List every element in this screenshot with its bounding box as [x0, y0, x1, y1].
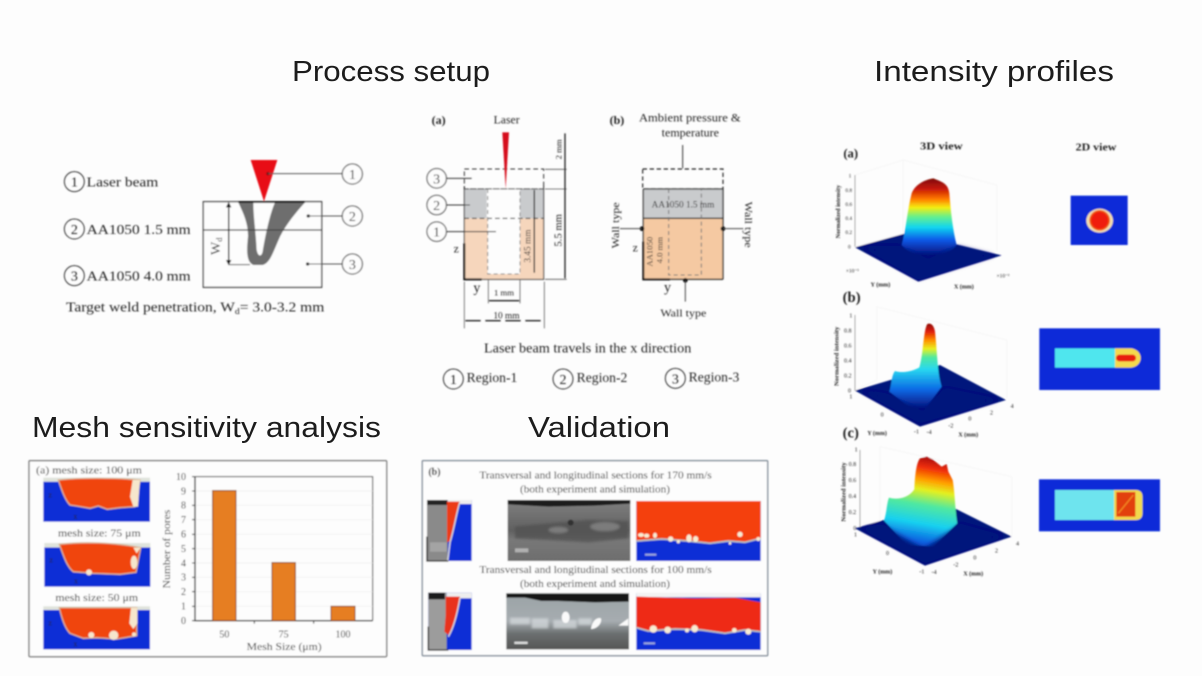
diagram (b): boundary conditions: temperature [662, 128, 719, 140]
2D heat map [1071, 196, 1128, 245]
3D surface plot: 0 [848, 244, 851, 250]
bar: 100 [331, 606, 355, 621]
3D surface plot b: 0.8 [844, 328, 851, 334]
callouts: numbered leader lines: 3 [349, 258, 356, 273]
diagram (a): domain regions: Laser [494, 114, 520, 126]
3D surface plot b: 1 [849, 313, 852, 319]
3D surface plot c: 0 [973, 555, 976, 561]
panel: validation [422, 461, 768, 656]
axis labels: Mesh Size (μm) [247, 642, 322, 653]
heading: 170 mm/s sections [428, 467, 712, 495]
panel: simulation domain diagrams [427, 112, 753, 389]
callouts: numbered leader lines: 1 [349, 168, 356, 183]
legend: numbered materials: 2 [71, 223, 78, 238]
axis labels: 2 [181, 587, 186, 598]
diagram (b): boundary conditions: Wall type [660, 309, 707, 320]
diagram (b): boundary conditions: Wall type [742, 202, 753, 248]
legend: numbered materials [64, 172, 191, 286]
diagram (b): boundary conditions: z [633, 241, 638, 255]
panel: weld target schematic [64, 160, 362, 316]
diagram (a): domain regions: 3.45 mm [524, 229, 534, 263]
axis labels for plot a [871, 282, 974, 291]
legend: regions: Region-2 [577, 370, 627, 385]
diagram: weld cross-section: W [209, 242, 224, 255]
panel: mesh sensitivity [29, 461, 387, 657]
3D surface plot: 0.8 [845, 188, 852, 194]
heading: 170 mm/s sections: (b) [428, 467, 441, 478]
experiment section 170 [508, 500, 630, 561]
3D surface plot c: 2 [995, 549, 998, 555]
3D surface plot b: Y (mm) [867, 430, 887, 437]
3D surface plot b: -1 [914, 429, 919, 435]
title: Validation: Validation [528, 412, 670, 444]
2D heat map b [1039, 328, 1160, 390]
3D surface plot: 0.6 [845, 202, 852, 208]
caption: target weld penetration: d [235, 306, 240, 316]
simulation: mesh size 100: x [73, 512, 77, 521]
simulation: mesh size 50: x [73, 639, 77, 648]
panel: intensity profile (a) [836, 141, 1128, 282]
title: Process setup: Process setup [292, 56, 490, 88]
simulation: mesh size 50 [43, 593, 150, 649]
axis labels for plot a: Y (mm) [871, 282, 890, 289]
heading: 170 mm/s sections: Transversal and longitudinal sections for 170 mm/s [479, 470, 712, 481]
simulation section 100 [636, 593, 761, 650]
axis labels: 50 [219, 630, 229, 641]
legend: numbered materials: Laser beam [87, 176, 158, 191]
3D surface plot b: Normalized intensity [833, 326, 840, 386]
axis labels: 7 [181, 515, 186, 526]
caption: target weld penetration: Target weld penetration, W [66, 300, 218, 315]
simulation: mesh size 75: z [49, 555, 53, 564]
labels: (a) [843, 146, 858, 160]
diagram (b): boundary conditions: Wall type [611, 202, 622, 248]
panel: intensity profile (b) and (c) [833, 282, 1160, 577]
legend: numbered materials: 3 [71, 270, 78, 285]
3D surface plot b: 4 [1011, 404, 1014, 410]
3D surface plot b: 0 [968, 417, 971, 423]
axis labels: 100 [336, 630, 350, 641]
3D surface plot c: 0.8 [849, 462, 856, 468]
diagram (b): boundary conditions: AA1050 [645, 237, 655, 267]
3D surface plot c: Y (mm) [873, 568, 892, 575]
label b: (b) [843, 290, 861, 306]
axis labels: 6 [181, 530, 186, 541]
legend: numbered materials: 1 [71, 176, 78, 191]
diagram (b): boundary conditions: y [664, 280, 671, 295]
axis labels: 8 [181, 501, 186, 512]
transverse section 170 [427, 500, 472, 561]
3D surface plot b: 0 [881, 413, 884, 419]
3D surface plot c: 1 [855, 448, 858, 454]
simulation section 170 [636, 501, 761, 561]
diagram (a): domain regions: 10 mm [493, 312, 520, 322]
simulation: mesh size 75: x [74, 576, 78, 585]
3D surface plot c: 0.2 [849, 510, 856, 516]
3D surface plot: ×10⁻³ [846, 268, 859, 274]
legend: regions: Region-1 [467, 370, 517, 385]
diagram (a): domain regions: (a) [432, 113, 446, 127]
axis labels: 10 [176, 472, 186, 483]
simulation: mesh size 100: (a) mesh size: 100 μm [36, 466, 143, 477]
labels [843, 141, 1117, 160]
3D surface plot: 1 [849, 173, 852, 179]
bar chart: number of pores vs mesh size [162, 472, 373, 653]
transverse section 100 [428, 593, 472, 650]
axis labels: 4 [181, 558, 186, 569]
axis labels: 0 [181, 616, 186, 627]
3D surface plot b: X (mm) [958, 432, 978, 439]
3D surface plot c: 0 [886, 551, 889, 557]
callouts: region numbers: 1 [433, 226, 440, 241]
simulation: mesh size 100: z [48, 491, 52, 500]
diagram (a): domain regions: 2 mm [553, 139, 563, 159]
legend: regions: 3 [672, 372, 679, 387]
callouts: region numbers: 2 [433, 199, 440, 214]
3D surface plot c: X (mm) [963, 570, 983, 577]
3D surface plot c: -2 [953, 563, 958, 569]
callouts: region numbers [427, 169, 496, 241]
simulation: mesh size 75 [44, 529, 150, 587]
bar: 75 [272, 563, 295, 621]
3D surface plot b: -2 [948, 424, 953, 430]
diagram (a): domain regions [432, 113, 567, 328]
legend: regions: Region-3 [689, 369, 740, 384]
axis labels [162, 472, 350, 653]
axis labels: 75 [279, 630, 289, 641]
legend: regions [443, 368, 740, 389]
3D surface plot b: 0 [848, 388, 851, 394]
3D surface plot b: 1 [849, 395, 852, 401]
diagram (b): boundary conditions: Ambient pressure & [639, 112, 741, 124]
legend: numbered materials: AA1050 4.0 mm [87, 270, 191, 285]
3D surface plot c: 1 [854, 533, 857, 539]
label c: (c) [843, 425, 859, 441]
3D surface plot c: 4 [1016, 541, 1019, 547]
labels: 3D view [920, 141, 964, 152]
axis labels: Number of pores [162, 510, 173, 588]
diagram (a): domain regions: 5.5 mm [553, 213, 564, 247]
3D surface plot b: 2 [990, 410, 993, 416]
diagram (a): domain regions: 1 mm [494, 287, 514, 297]
simulation: mesh size 75: mesh size: 75 μm [58, 529, 141, 540]
diagram (a): domain regions: y [473, 281, 480, 296]
diagram: weld cross-section [203, 160, 322, 287]
3D surface plot: Normalized intensity [836, 185, 842, 238]
3D surface plot b: -4 [927, 430, 932, 436]
axis labels: 5 [181, 544, 186, 555]
2D heat map c [1039, 479, 1160, 531]
callouts: region numbers: 3 [433, 172, 440, 187]
legend: regions: 1 [450, 373, 457, 388]
diagram (b): boundary conditions: (b) [610, 113, 624, 127]
3D surface plot: 0.4 [845, 216, 852, 222]
labels: 2D view [1076, 143, 1117, 154]
axis labels for plot a: X (mm) [954, 284, 974, 291]
3D surface plot c: -4 [932, 570, 937, 576]
3D surface plot [836, 160, 1010, 282]
3D surface plot c: Normalized intensity [840, 462, 847, 522]
3D surface plot b: 0.2 [844, 373, 851, 379]
heading: 100 mm/s sections: (both experiment and simulation) [520, 579, 670, 590]
diagram (b): boundary conditions: AA1050 1.5 mm [652, 200, 715, 210]
bar: 50 [213, 491, 236, 621]
simulation: mesh size 100 [36, 466, 150, 522]
simulation: mesh size 50: z [48, 619, 52, 628]
axis labels: 1 [181, 602, 186, 613]
diagram (b): boundary conditions: 4.0 mm [655, 237, 665, 263]
caption: target weld penetration: = 3.0-3.2 mm [240, 300, 324, 315]
title: Mesh sensitivity analysis: Mesh sensitivity analysis [32, 412, 381, 444]
callouts: numbered leader lines [266, 164, 362, 274]
diagram: weld cross-section: d [214, 237, 224, 242]
heading: 100 mm/s sections [479, 565, 712, 590]
axis labels: 3 [181, 573, 186, 584]
heading: 170 mm/s sections: (both experiment and simulation) [520, 484, 670, 495]
3D surface plot: 0.2 [845, 230, 852, 236]
title: Intensity profiles: Intensity profiles [874, 56, 1114, 88]
axis labels: 9 [181, 486, 186, 497]
diagram (a): domain regions: z [454, 242, 459, 256]
3D surface plot c: 0.6 [849, 478, 856, 484]
3D surface plot b [833, 307, 1014, 439]
3D surface plot b: 0.6 [844, 343, 851, 349]
diagram (b): boundary conditions [610, 112, 753, 320]
3D surface plot c: -1 [919, 569, 924, 575]
experiment section 100 [506, 593, 629, 649]
3D surface plot c [840, 447, 1019, 577]
callouts: numbered leader lines: 2 [349, 210, 356, 225]
3D surface plot c: 0.4 [849, 494, 856, 500]
legend: regions: 2 [559, 373, 566, 388]
3D surface plot: ×10⁻³ [997, 273, 1010, 279]
caption: laser direction: Laser beam travels in the x direction [484, 341, 692, 356]
simulation: mesh size 50: mesh size: 50 μm [55, 593, 139, 604]
3D surface plot c: 0 [853, 526, 856, 532]
heading: 100 mm/s sections: Transversal and longitudinal sections for 100 mm/s [479, 565, 712, 576]
legend: numbered materials: AA1050 1.5 mm [87, 223, 191, 238]
3D surface plot b: 0.4 [844, 358, 851, 364]
